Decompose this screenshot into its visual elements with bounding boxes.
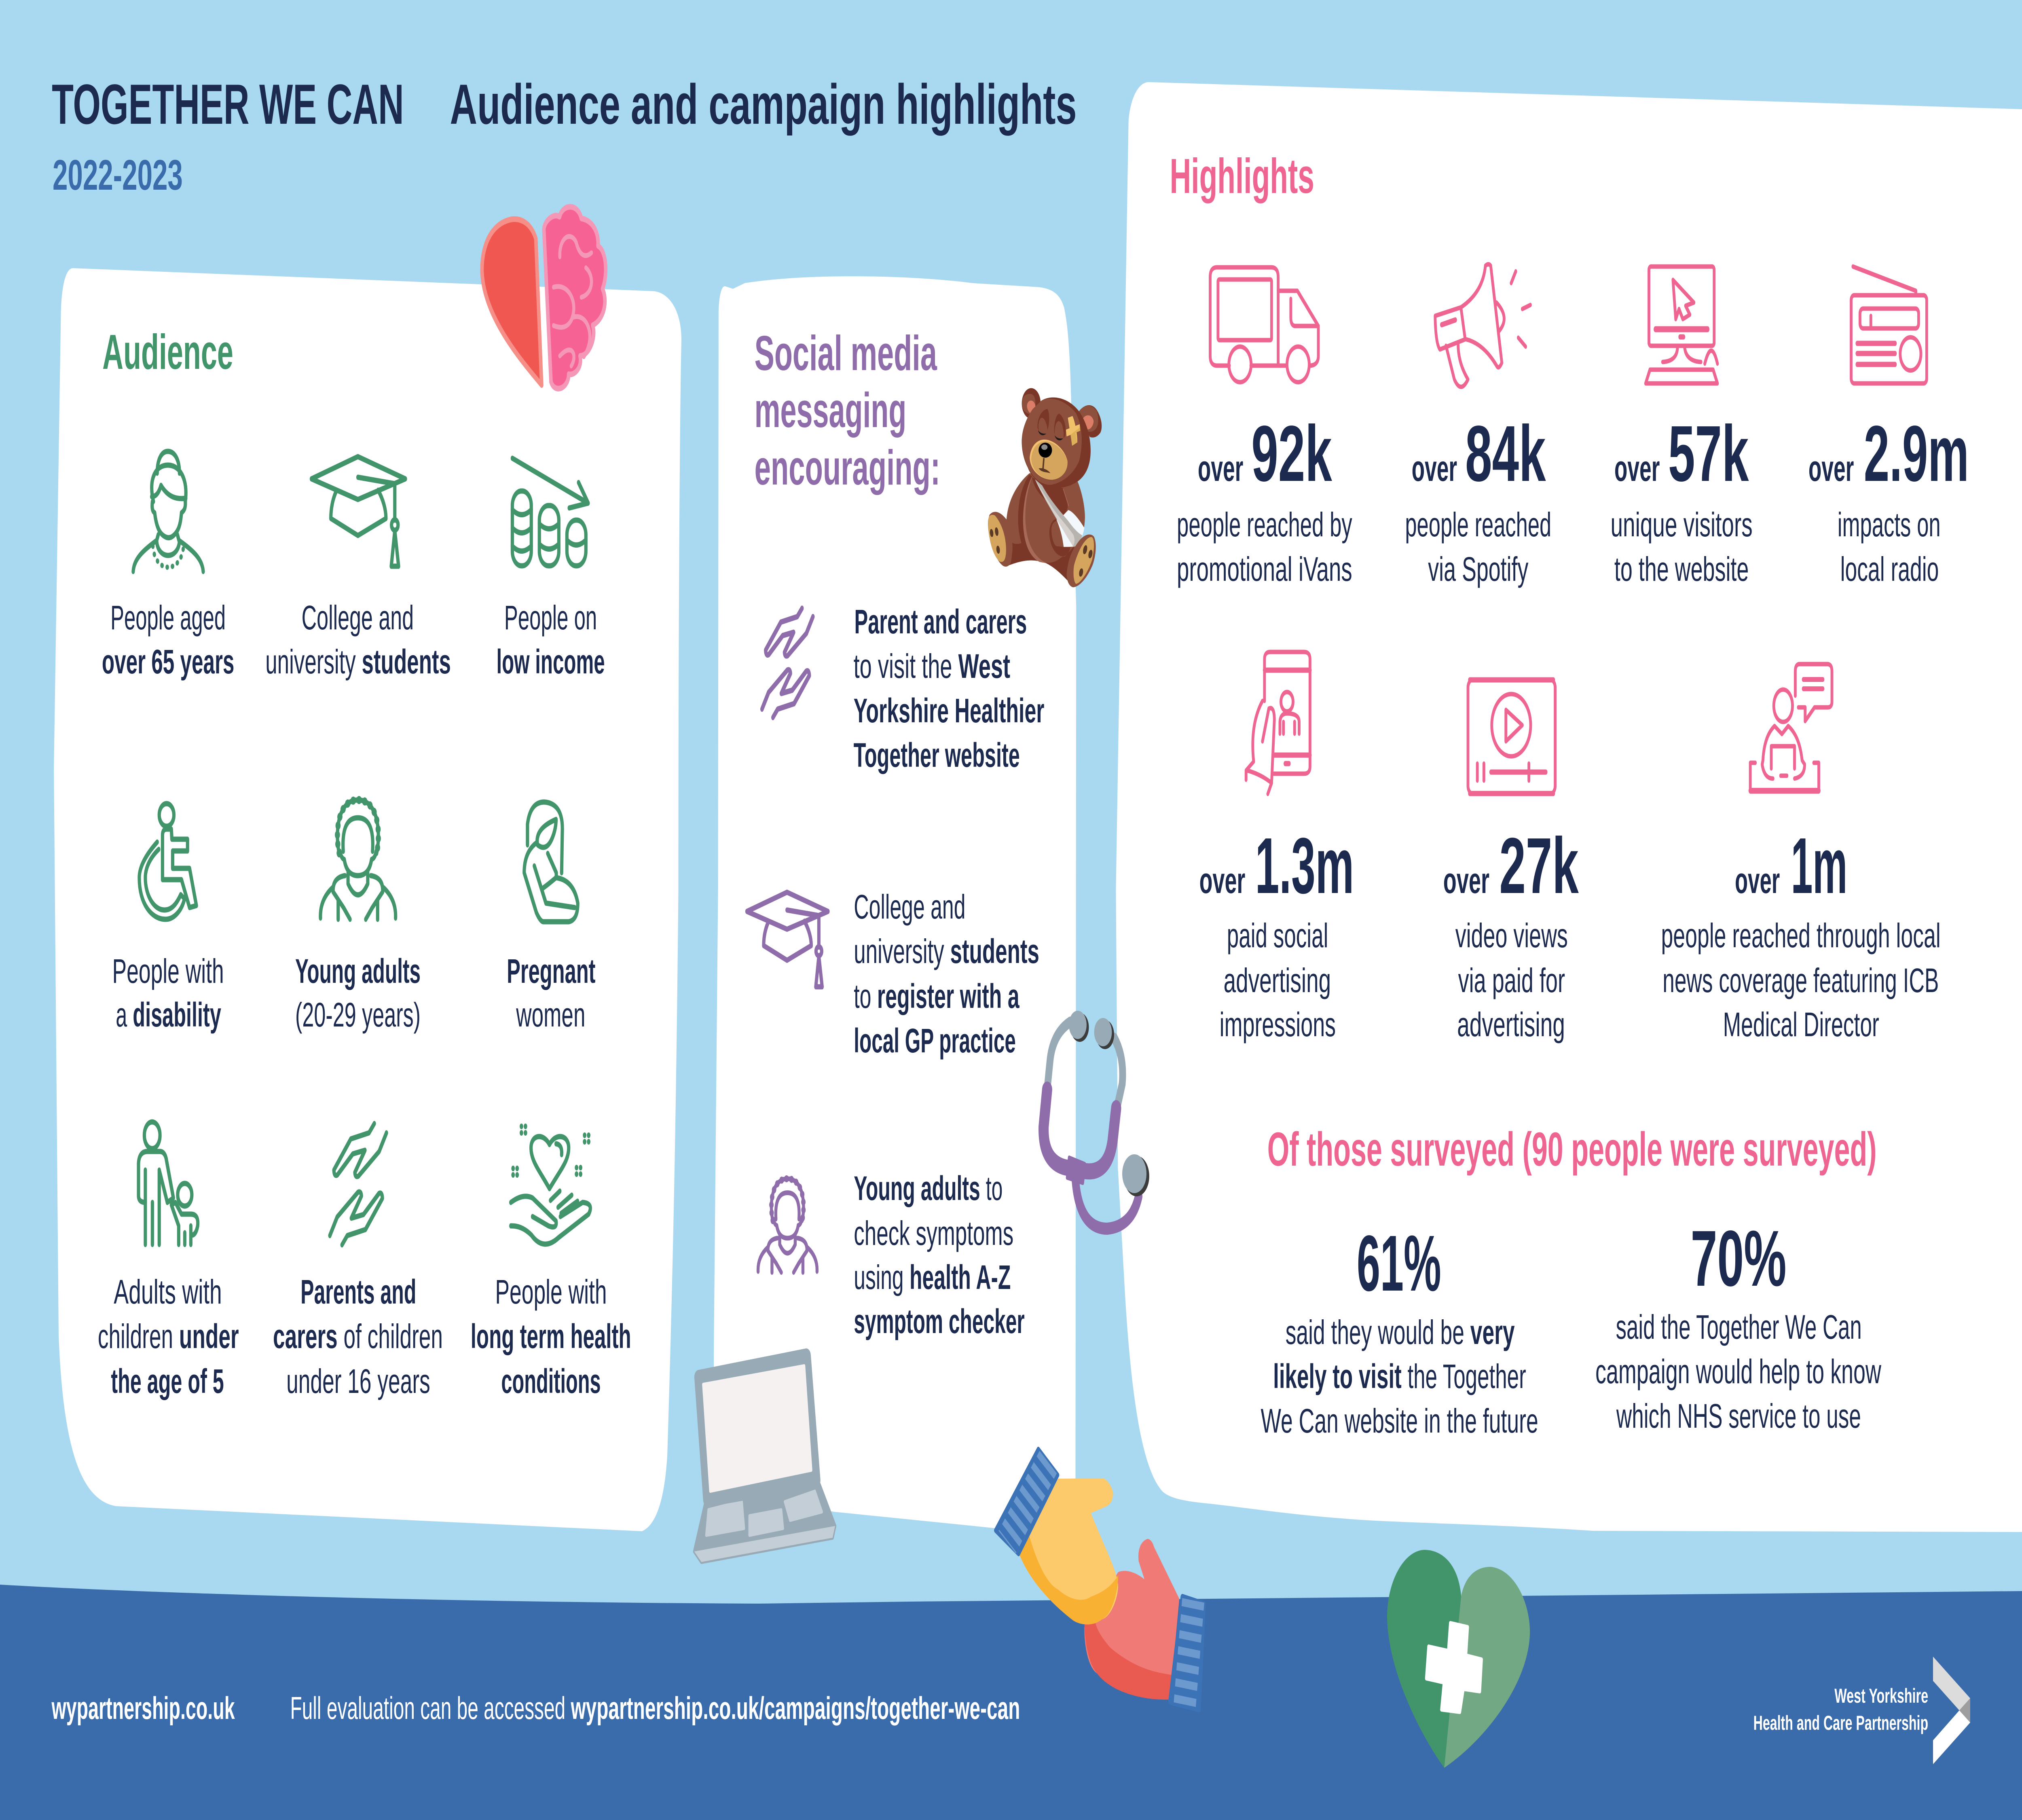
text: students message: local GP practice bbox=[854, 1022, 1016, 1060]
stat: 70%: said the Together We Can bbox=[1616, 1308, 1862, 1346]
icon: radio bbox=[1851, 267, 1927, 383]
logo: West Yorkshire Health and Care Partnership bbox=[1753, 1657, 1970, 1764]
stat: 1.3m: impressions bbox=[1220, 1005, 1336, 1043]
illustration: green heart with cross bbox=[1387, 1550, 1530, 1768]
label: adults with children under 5 bbox=[98, 1273, 239, 1400]
text: students message bbox=[854, 888, 1039, 1060]
stat: 1m: Medical Director bbox=[1723, 1005, 1879, 1043]
stat: 61%: 61% bbox=[1357, 1219, 1441, 1308]
label: parents and carers: under 16 years bbox=[286, 1362, 430, 1400]
icon: person at laptop with speech bubble bbox=[1750, 664, 1832, 791]
label: pregnant women: women bbox=[516, 996, 585, 1034]
stat: 57k: unique visitors bbox=[1610, 506, 1753, 544]
stat: 1m: over bbox=[1735, 860, 1780, 901]
highlights heading: Highlights bbox=[1170, 148, 1314, 203]
icon: caring hands purple bbox=[762, 608, 813, 717]
stat: 1.3m bbox=[1199, 821, 1354, 1043]
text: parents and carers message: Yorkshire Healthier bbox=[854, 692, 1045, 730]
icon: van bbox=[1210, 267, 1318, 382]
stat: 92k: promotional iVans bbox=[1177, 550, 1352, 588]
stat: 1m: people reached through local bbox=[1661, 916, 1941, 954]
label: people with a disability: People with bbox=[112, 952, 224, 990]
logo: West Yorkshire Health and Care Partnership: West Yorkshire bbox=[1834, 1684, 1928, 1707]
stat: 27k: via paid for bbox=[1458, 961, 1565, 999]
label: young adults: Young adults bbox=[295, 952, 421, 990]
stat: 1.3m: advertising bbox=[1224, 961, 1331, 999]
label: college and university students: university students bbox=[265, 643, 451, 681]
label: long term health conditions: People with bbox=[495, 1273, 607, 1311]
icon: computer bbox=[1646, 267, 1717, 383]
icon: low income coins bbox=[512, 458, 588, 566]
icon: young adult purple bbox=[758, 1179, 817, 1272]
illustration: injured teddy bear bbox=[988, 388, 1102, 587]
label: people with a disability: a disability bbox=[116, 996, 221, 1034]
text: parents and carers message: to visit the West bbox=[854, 647, 1010, 685]
icon: graduation cap bbox=[311, 457, 405, 566]
social heading: Social media bbox=[755, 326, 937, 381]
icon: adult with child bbox=[138, 1122, 198, 1244]
stat: 27k bbox=[1443, 821, 1579, 1043]
footer text: full evaluation link: Full evaluation can be accessed wypartnership.co.uk/campaigns/together-we-can bbox=[290, 1690, 1020, 1726]
footer band bbox=[0, 1585, 2022, 1820]
stat: 1.3m: over bbox=[1199, 860, 1245, 901]
label: long term health conditions: conditions bbox=[501, 1362, 601, 1400]
title: TOGETHER WE CAN bbox=[52, 72, 404, 136]
text: students message: to register with a bbox=[854, 977, 1019, 1015]
label: young adults: (20-29 years) bbox=[295, 996, 421, 1034]
social heading: messaging bbox=[755, 383, 906, 438]
stat: 84k: people reached bbox=[1405, 506, 1551, 544]
stat: 92k: people reached by bbox=[1177, 506, 1352, 544]
stat: 84k: via Spotify bbox=[1428, 550, 1528, 588]
stat: 1.3m: 1.3m bbox=[1255, 821, 1354, 910]
icon: young adult bbox=[320, 800, 396, 919]
stat: 70% bbox=[1595, 1214, 1881, 1435]
logo: West Yorkshire Health and Care Partnership: Health and Care Partnership bbox=[1753, 1711, 1928, 1734]
label: parents and carers: Parents and bbox=[300, 1273, 416, 1311]
label: people on low income: low income bbox=[497, 643, 605, 681]
text: parents and carers message: Together website bbox=[854, 736, 1020, 774]
label: people aged over 65: over 65 years bbox=[102, 643, 234, 681]
stat: 1m bbox=[1661, 821, 1941, 1043]
icon: megaphone bbox=[1435, 265, 1530, 387]
stat: 27k: advertising bbox=[1457, 1005, 1565, 1043]
footer text: website: wypartnership.co.uk bbox=[51, 1690, 235, 1726]
stat: 92k: 92k bbox=[1251, 409, 1332, 498]
label: pregnant women: Pregnant bbox=[507, 952, 595, 990]
stat: 1m: news coverage featuring ICB bbox=[1662, 961, 1939, 999]
stat: 2.9m: local radio bbox=[1840, 550, 1939, 588]
text: students message: university students bbox=[854, 932, 1039, 970]
audience panel background bbox=[54, 268, 681, 1531]
icon: hand holding phone bbox=[1246, 652, 1310, 794]
stat: 61% bbox=[1261, 1219, 1538, 1440]
illustration: red mitten bbox=[1084, 1539, 1204, 1710]
panel: highlights bbox=[1116, 82, 2022, 1532]
subtitle: years: 2022-2023 bbox=[53, 151, 183, 199]
stat: 70%: which NHS service to use bbox=[1616, 1397, 1861, 1435]
stat: 70%: 70% bbox=[1691, 1214, 1787, 1303]
text: young adults message: check symptoms bbox=[854, 1214, 1013, 1252]
label: people with a disability bbox=[112, 952, 224, 1034]
label: adults with children under 5: Adults with bbox=[114, 1273, 222, 1311]
label: parents and carers: carers of children bbox=[273, 1317, 443, 1355]
title bbox=[52, 72, 1077, 136]
illustration: laptop bbox=[694, 1356, 835, 1562]
social heading: encouraging: bbox=[755, 440, 940, 495]
label: college and university students bbox=[265, 599, 451, 681]
icon: pregnant woman bbox=[524, 802, 578, 922]
text: parents and carers message bbox=[854, 603, 1044, 774]
icon: wheelchair user bbox=[139, 804, 197, 919]
stat: 57k bbox=[1610, 409, 1753, 588]
stat: 84k: 84k bbox=[1465, 409, 1546, 498]
text: young adults message bbox=[854, 1169, 1025, 1340]
label: long term health conditions: long term health bbox=[471, 1317, 631, 1355]
label: people aged over 65: People aged bbox=[110, 599, 226, 637]
stat: 57k: over bbox=[1614, 448, 1660, 489]
stat: 1.3m: paid social bbox=[1227, 916, 1328, 954]
icon: heart in hand bbox=[511, 1124, 590, 1244]
stat: 92k: over bbox=[1198, 448, 1243, 489]
label: young adults bbox=[295, 952, 421, 1034]
stat: 2.9m: impacts on bbox=[1838, 506, 1941, 544]
stat: 57k: to the website bbox=[1614, 550, 1749, 588]
stat: 1m: 1m bbox=[1791, 821, 1847, 910]
text: young adults message: using health A-Z bbox=[854, 1258, 1011, 1296]
audience heading: Audience bbox=[102, 324, 233, 379]
label: adults with children under 5: children under bbox=[98, 1317, 239, 1355]
icon: older woman bbox=[133, 451, 203, 571]
stat: 2.9m: 2.9m bbox=[1864, 409, 1969, 498]
stat: 84k: over bbox=[1412, 448, 1457, 489]
label: parents and carers bbox=[273, 1273, 443, 1400]
text: young adults message: symptom checker bbox=[854, 1302, 1025, 1340]
label: long term health conditions bbox=[471, 1273, 631, 1400]
icon: caring hands bbox=[330, 1124, 387, 1245]
label: pregnant women bbox=[507, 952, 595, 1034]
illustration: yellow mitten bbox=[996, 1449, 1118, 1624]
social panel background bbox=[714, 276, 1076, 1528]
illustration: stethoscope bbox=[1044, 1011, 1149, 1229]
stat: 84k bbox=[1405, 409, 1551, 588]
social heading bbox=[755, 326, 940, 495]
text: parents and carers message: Parent and carers bbox=[854, 603, 1027, 641]
stat: 2.9m bbox=[1808, 409, 1969, 588]
label: adults with children under 5: the age of 5 bbox=[111, 1362, 224, 1400]
stat: 70%: campaign would help to know bbox=[1595, 1352, 1881, 1390]
stat: 57k: 57k bbox=[1668, 409, 1749, 498]
label: people on low income bbox=[497, 599, 605, 681]
title: Audience and campaign highlights bbox=[450, 72, 1077, 136]
stat: 61%: We Can website in the future bbox=[1261, 1402, 1538, 1440]
icon: video player bbox=[1468, 679, 1555, 794]
illustration: heart and brain bbox=[482, 207, 606, 389]
text: students message: College and bbox=[854, 888, 966, 926]
survey heading: Of those surveyed (90 people were surveyed) bbox=[1267, 1122, 1877, 1176]
stat: 61%: said they would be very bbox=[1286, 1313, 1515, 1351]
panel: audience bbox=[54, 268, 681, 1531]
stat: 61%: likely to visit the Together bbox=[1273, 1357, 1526, 1395]
label: people aged over 65 bbox=[102, 599, 234, 681]
stat: 27k: 27k bbox=[1500, 821, 1579, 910]
stat: 2.9m: over bbox=[1808, 448, 1854, 489]
label: people on low income: People on bbox=[504, 599, 597, 637]
stat: 92k bbox=[1177, 409, 1352, 588]
panel: social media bbox=[714, 276, 1076, 1528]
icon: graduation cap purple bbox=[747, 892, 828, 987]
stat: 27k: over bbox=[1443, 860, 1489, 901]
text: young adults message: Young adults to bbox=[854, 1169, 1003, 1207]
stat: 27k: video views bbox=[1455, 916, 1568, 954]
label: college and university students: College and bbox=[302, 599, 414, 637]
highlights panel background bbox=[1116, 82, 2022, 1532]
